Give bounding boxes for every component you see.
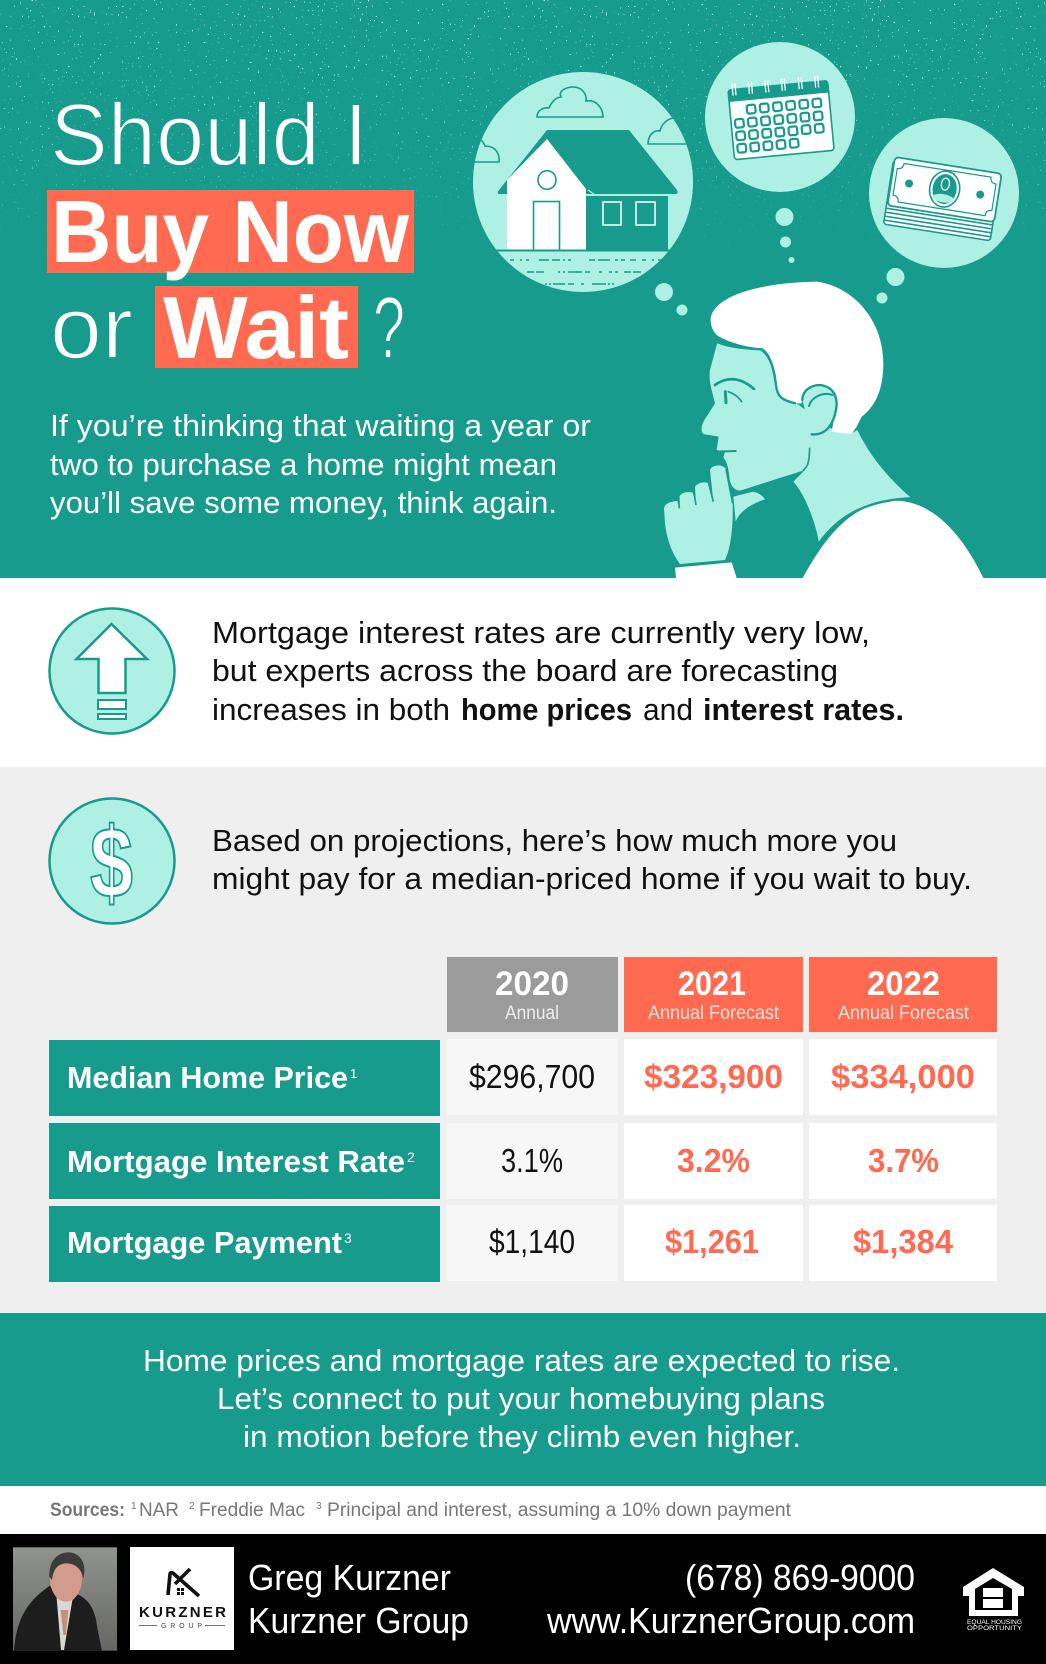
title: Should I [50, 85, 368, 184]
thought bubbles [655, 208, 904, 316]
callout text: home prices [461, 692, 632, 727]
contact details: (678) 869-9000 [685, 1557, 915, 1598]
projections text [212, 823, 972, 896]
icon: up arrow [50, 608, 174, 734]
agent name: Kurzner Group [248, 1600, 469, 1641]
row: mortgage interest rate: 2 [407, 1149, 415, 1165]
sources: Sources: [50, 1500, 125, 1521]
contact details [546, 1557, 915, 1641]
icon: thought bubble house [460, 72, 704, 292]
intro text: two to purchase a home might mean [50, 447, 557, 482]
row: mortgage payment: $1,140 [489, 1223, 575, 1260]
panel: interest rates callout [0, 578, 1046, 767]
sources: Freddie Mac [199, 1500, 305, 1521]
sources: Principal and interest, assuming a 10% down payment [327, 1500, 792, 1521]
row: median home price: Median Home Price [67, 1060, 348, 1095]
column header: 2020: 2020 [495, 965, 569, 1003]
title: Wait [163, 278, 349, 377]
panel: call to action: Home prices and mortgage rates are expected to rise. [143, 1343, 900, 1378]
row: median home price: 1 [350, 1066, 357, 1081]
icon: equal housing opportunity: OPPORTUNITY [967, 1625, 1023, 1632]
callout text: increases in both [212, 692, 450, 727]
row: median home price: $323,900 [644, 1058, 783, 1095]
sources: 1 [131, 1501, 137, 1512]
row: median home price [49, 1039, 997, 1116]
row: mortgage interest rate: 3.7% [868, 1142, 939, 1179]
agent name: Greg Kurzner [248, 1557, 451, 1598]
column header: 2021 [624, 957, 803, 1032]
callout text: but experts across the board are forecasting [212, 653, 838, 688]
table: price forecast [49, 957, 997, 1282]
row: mortgage payment: $1,261 [665, 1223, 759, 1260]
panel: call to action: in motion before they climb even higher. [243, 1419, 801, 1454]
icon: dollar sign: $ [90, 807, 133, 919]
sources: 3 [316, 1501, 322, 1512]
callout text [212, 615, 904, 727]
row: mortgage payment: 3 [344, 1230, 352, 1246]
icon: equal housing opportunity: EQUAL HOUSING [967, 1619, 1022, 1626]
column header: 2020: Annual [505, 1003, 559, 1024]
icon: dollar sign [50, 798, 174, 924]
panel: call to action [0, 1313, 1046, 1486]
row: mortgage interest rate [49, 1123, 997, 1199]
projections text: might pay for a median-priced home if you wait to buy. [212, 861, 972, 896]
icon: equal housing opportunity [963, 1568, 1024, 1632]
agent photo [13, 1547, 117, 1651]
panel: projections [0, 767, 1046, 1313]
sources: NAR [139, 1500, 179, 1521]
title: or [50, 278, 133, 377]
callout text: and [643, 692, 693, 727]
column header: 2022 [809, 957, 997, 1032]
panel: call to action: Let’s connect to put your homebuying plans [217, 1381, 825, 1416]
row: mortgage interest rate: 3.1% [501, 1142, 563, 1179]
column header: 2021: 2021 [678, 965, 746, 1003]
icon: thought bubble money [869, 118, 1019, 268]
intro text: If you’re thinking that waiting a year or [50, 408, 591, 443]
row: mortgage payment [49, 1205, 997, 1282]
agency logo: KURZNER [139, 1604, 226, 1621]
intro text [50, 408, 591, 520]
intro text: you’ll save some money, think again. [50, 485, 557, 520]
sources: 2 [189, 1501, 195, 1512]
column header: 2022: Annual Forecast [838, 1003, 970, 1024]
projections text: Based on projections, here’s how much more you [212, 823, 897, 858]
sources [0, 1486, 1046, 1534]
row: median home price: $334,000 [831, 1058, 975, 1095]
icon: thought bubble calendar [705, 42, 855, 192]
column header: 2020 [447, 957, 618, 1032]
column header: 2021: Annual Forecast [648, 1003, 780, 1024]
contact details: www.KurznerGroup.com [546, 1600, 915, 1641]
title: Buy Now [51, 182, 410, 281]
agent name [248, 1557, 469, 1641]
agency logo: GROUP [161, 1623, 202, 1630]
row: mortgage interest rate: 3.2% [677, 1142, 750, 1179]
title: ? [373, 278, 405, 377]
row: mortgage payment: $1,384 [853, 1223, 954, 1260]
illustration: thinking man [664, 282, 983, 578]
agency logo [130, 1547, 234, 1650]
callout text: interest rates. [703, 692, 904, 727]
row: mortgage payment: Mortgage Payment [67, 1225, 342, 1260]
row: median home price: $296,700 [469, 1058, 595, 1095]
panel: footer [0, 1534, 1046, 1664]
column header: 2022: 2022 [867, 965, 940, 1003]
title [47, 85, 414, 377]
callout text: Mortgage interest rates are currently very low, [212, 615, 870, 650]
row: mortgage interest rate: Mortgage Interest Rate [67, 1144, 405, 1179]
panel: hero background [0, 0, 1046, 578]
